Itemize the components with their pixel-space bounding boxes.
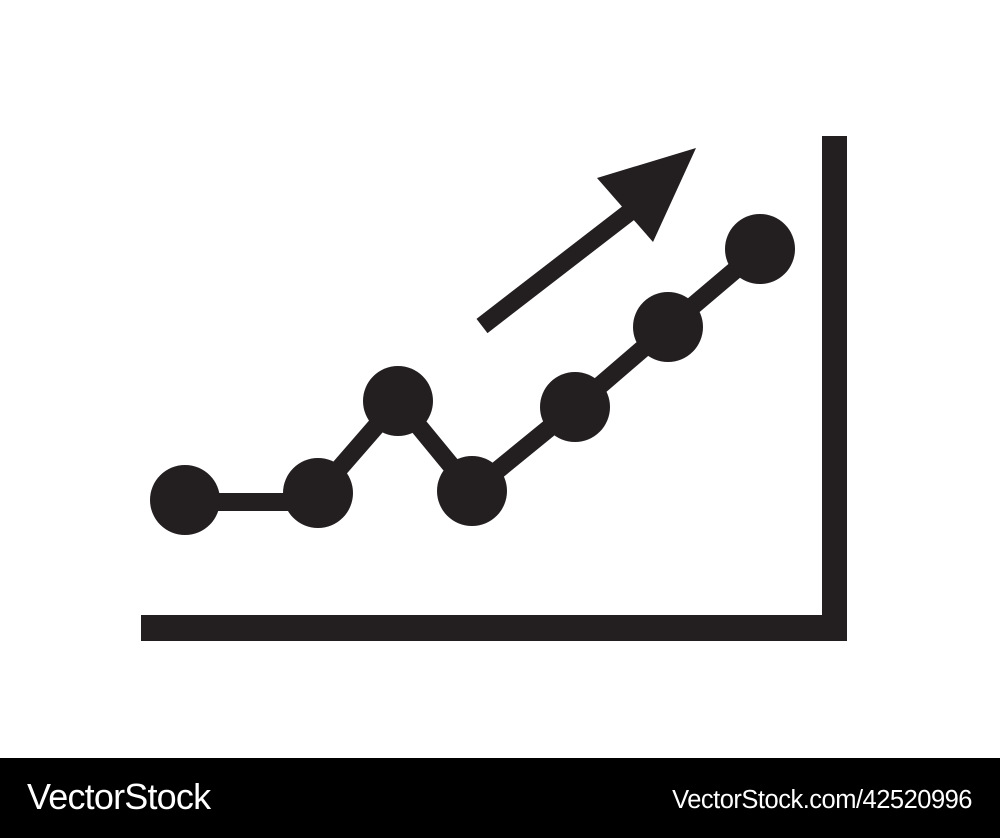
footer reference id: VectorStock.com/42520996 (672, 786, 972, 814)
arrow: upward trend (482, 148, 696, 326)
footer brand text: VectorStock (27, 776, 210, 817)
footer bar (0, 758, 1000, 838)
axes (141, 136, 847, 641)
line series with dots (150, 214, 795, 535)
